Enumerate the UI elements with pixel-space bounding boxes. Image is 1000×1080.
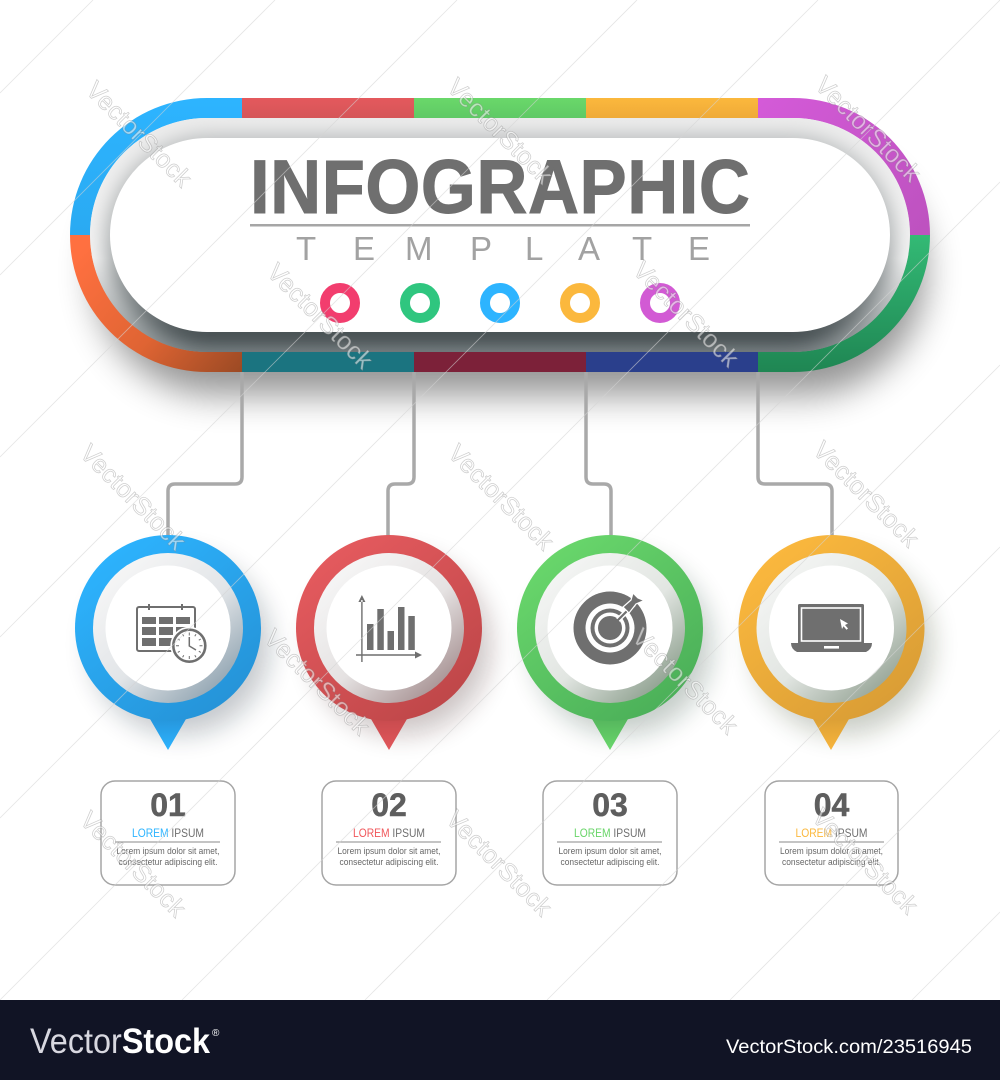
title: INFOGRAPHIC (250, 145, 750, 230)
info box 01: 01 (150, 787, 186, 823)
five colour dots (325, 288, 675, 318)
VectorStock watermarks: VectorStock (809, 71, 926, 188)
info box 03 (543, 781, 677, 885)
footer bar: ® (212, 1028, 220, 1039)
VectorStock watermarks (74, 71, 926, 923)
icon: calendar with clock (137, 604, 208, 665)
pin 4: yellow laptop (738, 535, 933, 750)
VectorStock watermarks: VectorStock (807, 436, 924, 553)
icon: bar chart (356, 595, 422, 662)
info box 02: 02 (371, 787, 407, 823)
VectorStock watermarks: VectorStock (441, 73, 558, 190)
pin 2: red chart (296, 535, 491, 750)
VectorStock watermarks: VectorStock (261, 258, 378, 375)
pin 1: blue calendar (75, 535, 270, 750)
subtitle: TEMPLATE (296, 230, 710, 267)
info box 04: consectetur adipiscing elit. (782, 857, 881, 867)
info box 02: consectetur adipiscing elit. (340, 857, 438, 867)
info box 01: Lorem ipsum dolor sit amet, (116, 846, 220, 856)
info box 01 (101, 781, 235, 885)
icon: target with arrow (574, 592, 646, 664)
info box 03: consectetur adipiscing elit. (560, 857, 660, 867)
info box 04: LOREM IPSUM (796, 826, 868, 840)
VectorStock watermarks: VectorStock (806, 803, 923, 920)
VectorStock watermarks: VectorStock (80, 76, 197, 193)
info box 04: 04 (814, 787, 850, 823)
icon: laptop with cursor (791, 604, 872, 652)
title rule (250, 224, 750, 226)
banner drop shadow (95, 150, 925, 395)
footer bar: VectorStock.com/23516945 (726, 1037, 972, 1058)
info box 02 (322, 781, 456, 885)
info box 02: LOREM IPSUM (353, 826, 425, 840)
banner: grey bevel ring (90, 118, 910, 352)
info box 01: consectetur adipiscing elit. (118, 857, 218, 867)
VectorStock watermarks: VectorStock (74, 806, 191, 923)
footer logo: VectorStock (30, 1022, 210, 1061)
info box 04 (765, 781, 898, 885)
banner: white centre panel (110, 138, 890, 332)
VectorStock watermarks: VectorStock (442, 439, 559, 556)
connector lines (168, 372, 832, 537)
banner: segmented pill frame (70, 98, 930, 372)
footer bar (0, 1000, 1000, 1080)
info box 03: LOREM IPSUM (574, 826, 646, 840)
info box 01: LOREM IPSUM (132, 826, 204, 840)
VectorStock watermarks: VectorStock (626, 623, 743, 740)
info box 03: 03 (592, 787, 628, 823)
VectorStock watermarks: VectorStock (258, 624, 375, 741)
VectorStock watermarks: VectorStock (627, 256, 744, 373)
VectorStock watermarks: VectorStock (74, 439, 191, 556)
info box 02: Lorem ipsum dolor sit amet, (338, 846, 440, 856)
info box 04: Lorem ipsum dolor sit amet, (780, 846, 883, 856)
info box 03: Lorem ipsum dolor sit amet, (558, 846, 662, 856)
pin 3: green target (517, 535, 712, 750)
VectorStock watermarks: VectorStock (440, 805, 557, 922)
